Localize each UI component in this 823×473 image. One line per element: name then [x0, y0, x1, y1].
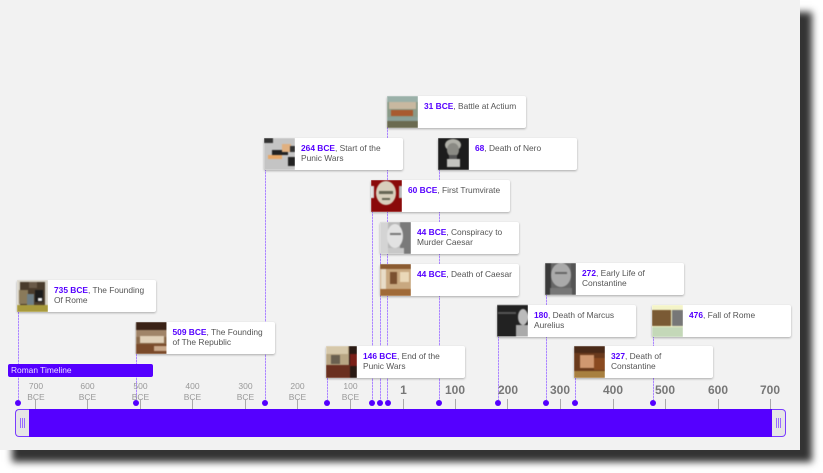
event: 146 BCE: Punic Wars: [363, 361, 406, 371]
axis labels and ticks: 200: [498, 383, 518, 397]
axis labels and ticks: BCE: [132, 392, 149, 402]
axis labels and ticks: BCE: [184, 392, 201, 402]
event: 327: 327, Death of: [611, 351, 661, 361]
axis labels and ticks: 500: [133, 381, 148, 391]
event: 264 BCE: [264, 138, 403, 170]
event: 264 BCE: 264 BCE, Start of the: [301, 143, 381, 153]
event: 31 BCE: 31 BCE, Battle at Actium: [424, 101, 516, 111]
axis labels and ticks: 400: [603, 383, 623, 397]
axis labels and ticks: 600: [708, 383, 728, 397]
event: 272: Constantine: [582, 278, 627, 288]
right handle: [772, 409, 786, 437]
axis labels and ticks: 100: [445, 383, 465, 397]
event: 44 BCE conspiracy: Murder Caesar: [417, 237, 473, 247]
event: 60 BCE: [371, 180, 510, 212]
event: 146 BCE: 146 BCE, End of the: [363, 351, 440, 361]
axis labels and ticks: 400: [185, 381, 200, 391]
event: 735 BCE: 735 BCE, The Founding: [54, 285, 144, 295]
event: 476: [652, 305, 791, 337]
event: 68: 68, Death of Nero: [475, 143, 541, 153]
event: 180: Aurelius: [534, 320, 564, 330]
event: 44 BCE death: 44 BCE, Death of Caesar: [417, 269, 512, 279]
axis labels and ticks: BCE: [79, 392, 96, 402]
event: 180: 180, Death of Marcus: [534, 310, 614, 320]
axis labels and ticks: BCE: [342, 392, 359, 402]
slider track: [29, 409, 772, 437]
axis labels and ticks: 1: [400, 383, 407, 397]
axis labels and ticks: BCE: [27, 392, 45, 402]
event: 31 BCE: [387, 96, 526, 128]
axis labels and ticks: 600: [80, 381, 95, 391]
event: 180: [497, 304, 636, 336]
event: 264 BCE: Punic Wars: [301, 153, 344, 163]
event: 44 BCE conspiracy: [380, 222, 519, 254]
event: 44 BCE death: [380, 264, 519, 296]
left handle: [15, 409, 29, 437]
axis labels and ticks: 100: [343, 381, 358, 391]
event: 509 BCE: 509 BCE, The Founding: [172, 327, 263, 337]
event: 272: 272, Early Life of: [582, 268, 645, 278]
event: 735 BCE: Of Rome: [54, 295, 88, 305]
event: 146 BCE: [326, 346, 465, 378]
event: 60 BCE: 60 BCE, First Trumvirate: [408, 185, 500, 195]
event: 509 BCE: [136, 322, 274, 354]
event: 327: [574, 346, 713, 378]
axis labels and ticks: 200: [290, 381, 305, 391]
axis labels and ticks: 700: [760, 383, 780, 397]
axis labels and ticks: 300: [238, 381, 253, 391]
event: 476: 476, Fall of Rome: [689, 310, 755, 320]
axis labels and ticks: 500: [655, 383, 675, 397]
event: 327: Constantine: [611, 361, 656, 371]
event: 44 BCE conspiracy: 44 BCE, Conspiracy to: [417, 227, 502, 237]
axis labels and ticks: 300: [550, 383, 570, 397]
event: 272: [545, 263, 684, 295]
axis labels and ticks: BCE: [289, 392, 306, 402]
axis labels and ticks: BCE: [237, 392, 254, 402]
range slider: [15, 409, 786, 437]
timeline title: [8, 364, 153, 377]
event: 735 BCE: [17, 280, 156, 312]
timeline title: Roman Timeline: [11, 365, 72, 375]
event: 509 BCE: of The Republic: [172, 337, 231, 347]
axis labels and ticks: 700: [29, 381, 43, 391]
event: 68: [438, 138, 577, 170]
